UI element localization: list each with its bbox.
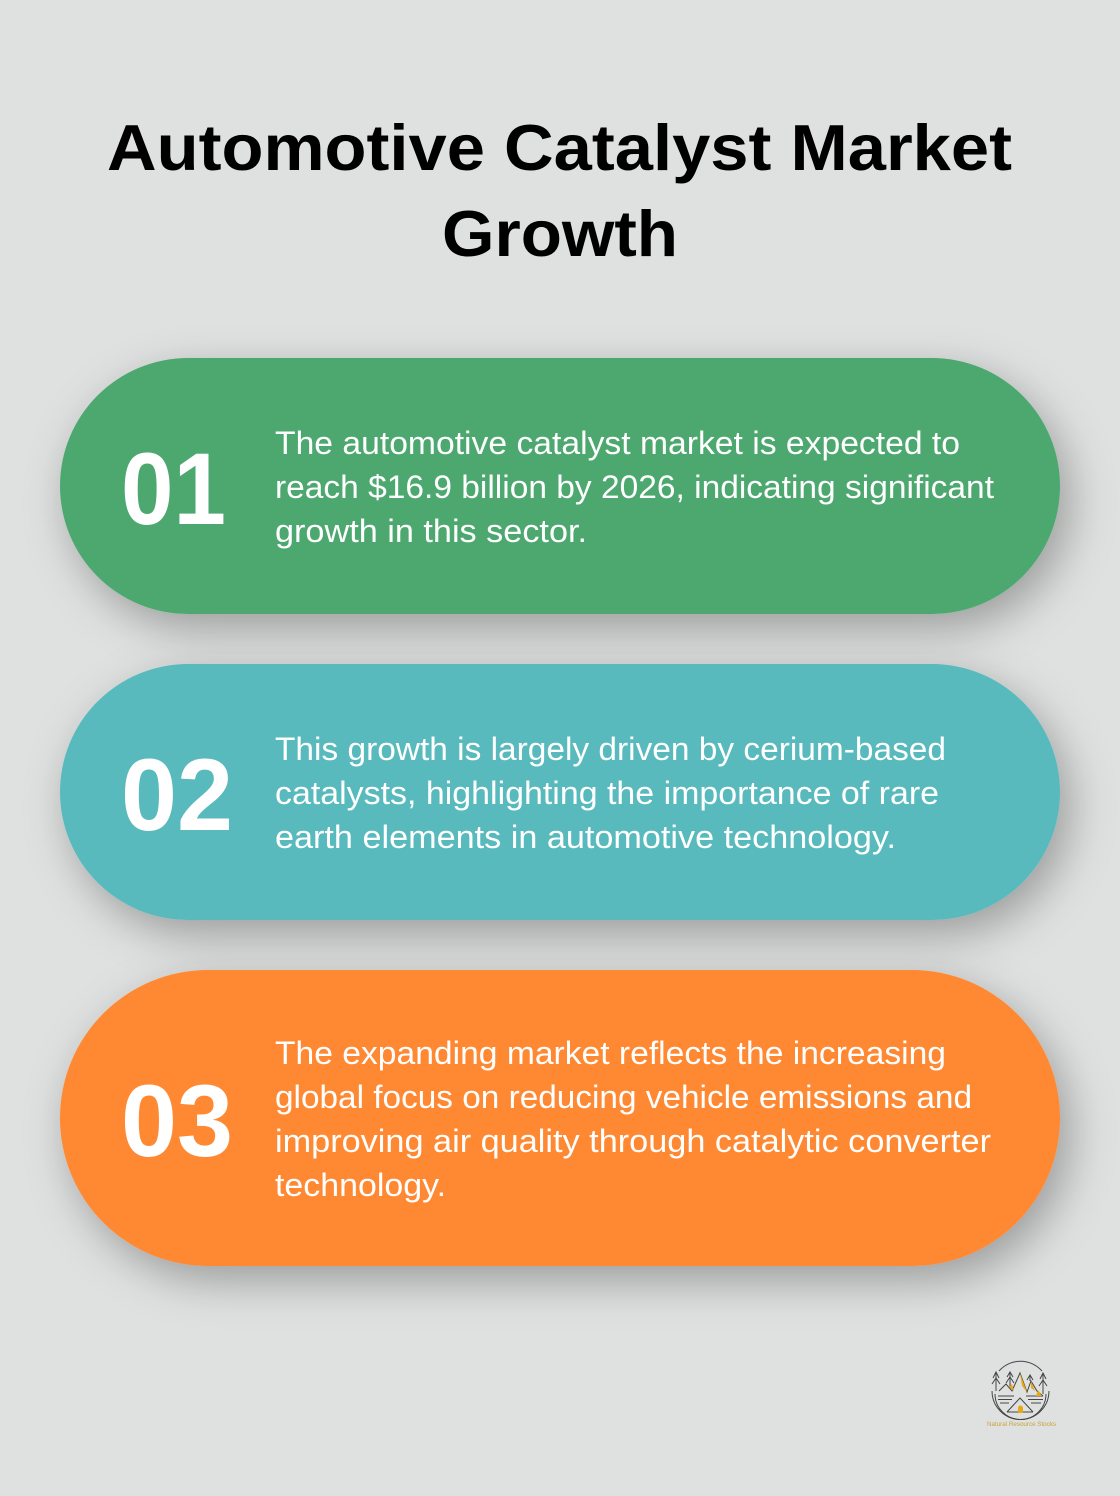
text block: step 02: This growth is largely driven by cerium-based <box>275 731 946 767</box>
text block: step 02 <box>275 731 946 855</box>
text block: step 03: global focus on reducing vehicle emissions and <box>275 1079 972 1115</box>
title: Automotive Catalyst Market <box>107 111 1012 184</box>
panel: step 01 <box>60 358 1060 614</box>
logo: Natural Resource Stocks <box>987 1361 1057 1428</box>
logo text: Natural Resource Stocks <box>987 1421 1057 1428</box>
number 01: 01 <box>121 432 226 546</box>
text block: step 01: The automotive catalyst market is expected to <box>275 425 960 461</box>
text block: step 02: catalysts, highlighting the importance of rare <box>275 775 939 811</box>
title <box>107 111 1012 270</box>
title: Growth <box>442 197 678 270</box>
icon: mountain emblem <box>992 1361 1049 1420</box>
text block: step 03: improving air quality through catalytic converter <box>275 1123 991 1159</box>
text block: step 03: The expanding market reflects the increasing <box>275 1035 946 1071</box>
number 02: 02 <box>121 738 233 852</box>
text block: step 03: technology. <box>275 1167 446 1203</box>
panel: step 03 <box>60 970 1060 1266</box>
pill background: orange <box>60 970 1060 1266</box>
pill background: teal <box>60 664 1060 920</box>
text block: step 03 <box>275 1035 991 1203</box>
text block: step 02: earth elements in automotive technology. <box>275 819 896 855</box>
pill background: green <box>60 358 1060 614</box>
text block: step 01: reach $16.9 billion by 2026, indicating significant <box>275 469 994 505</box>
number 03: 03 <box>121 1064 233 1178</box>
panel: step 02 <box>60 664 1060 920</box>
text block: step 01 <box>275 425 994 549</box>
text block: step 01: growth in this sector. <box>275 513 587 549</box>
